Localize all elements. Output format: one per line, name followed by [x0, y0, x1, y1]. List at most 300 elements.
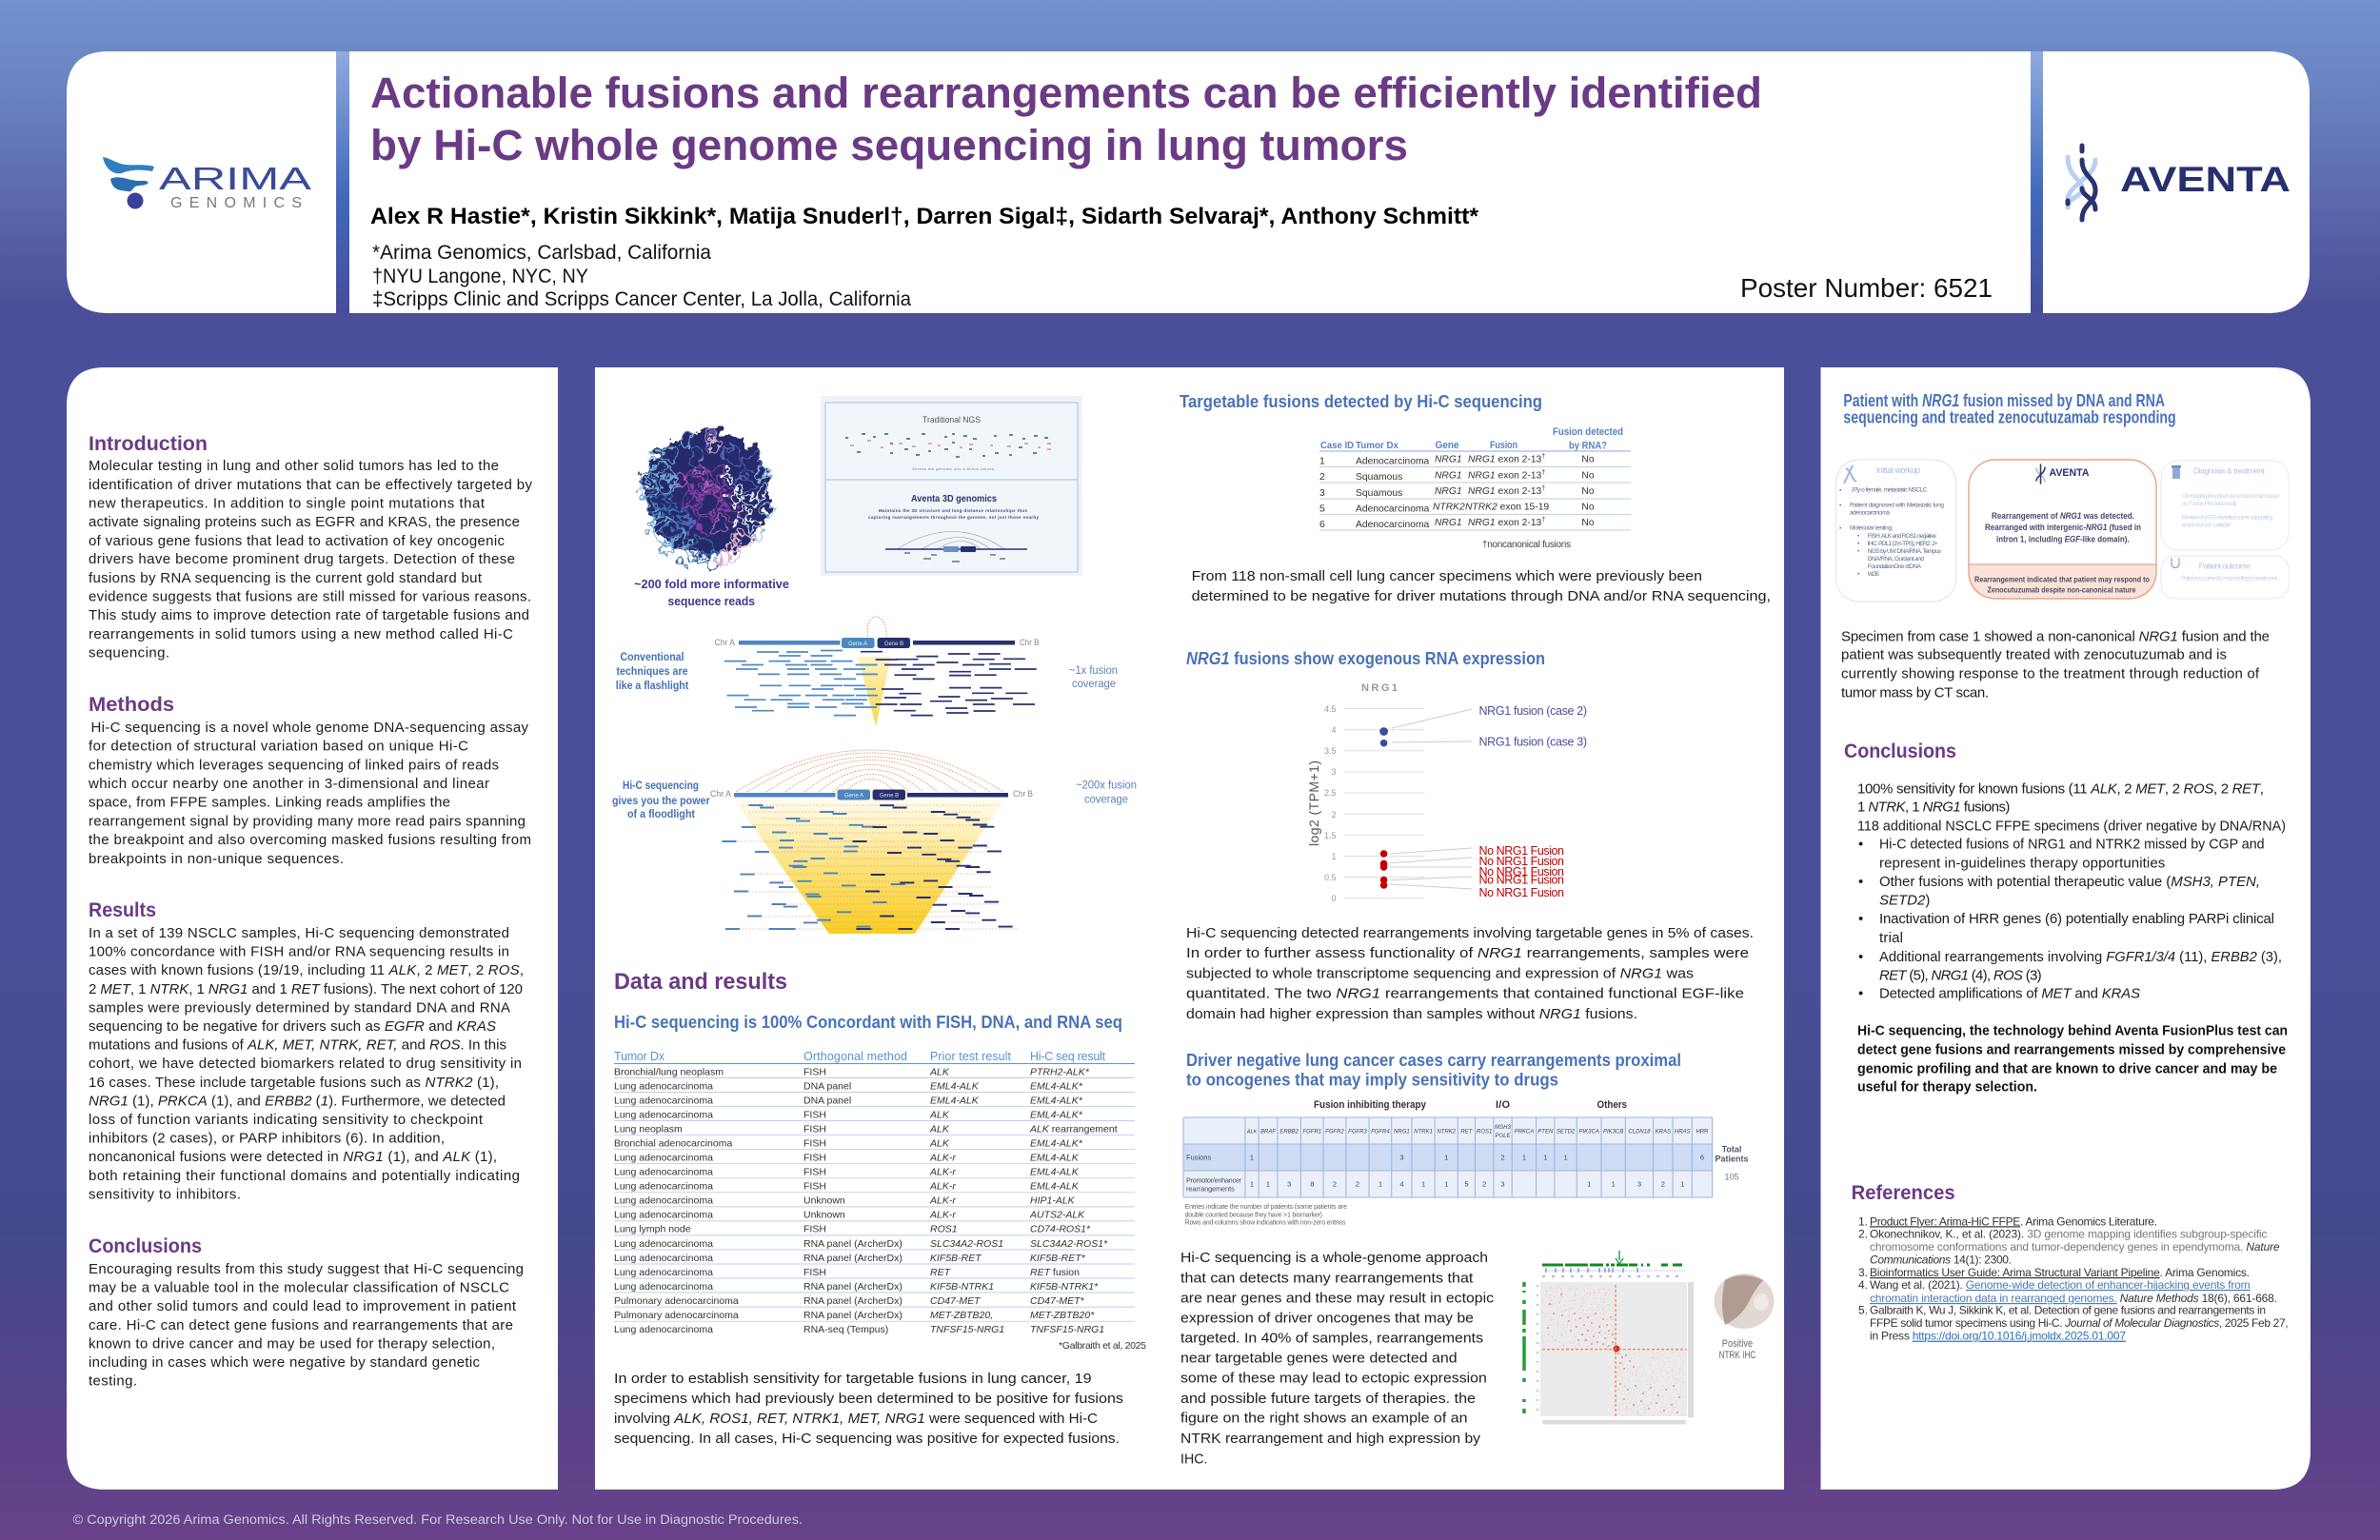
table: concordance results: Lung adenocarcinoma — [614, 1152, 713, 1163]
row: promotor/enhancer: 1 — [1378, 1180, 1382, 1189]
text: results body: both retaining their functional domains and potentially indicating — [89, 1168, 520, 1184]
chart: short reads — [845, 434, 1051, 457]
card list: • — [1857, 571, 1860, 578]
text: conclusions summary: Detected amplifications of MET and KRAS — [1879, 986, 2140, 1002]
table: concordance results: Lung adenocarcinoma — [614, 1210, 713, 1221]
group labels: Others — [1597, 1099, 1627, 1111]
panel: Traditional NGS vs Aventa 3D — [821, 396, 1082, 576]
text: whole-genome paragraph: expression of driver oncogenes that may be — [1180, 1310, 1474, 1326]
text: 118 specimens paragraph — [1192, 568, 1771, 604]
text: functionality paragraph — [1186, 925, 1754, 1022]
text: conclusions summary: Other fusions with potential therapeutic value (MSH3, PTEN, — [1879, 874, 2260, 890]
text: functionality paragraph: In order to further assess functionality of NRG1 rearrangements, samples were — [1186, 945, 1749, 961]
table: concordance results: Lung adenocarcinoma — [614, 1095, 713, 1106]
table: concordance results: SLC34A2-ROS1* — [1030, 1238, 1108, 1250]
column headers: PTEN — [1537, 1130, 1554, 1135]
box: Gene A — [842, 638, 874, 648]
diagram: conventional flashlight — [616, 617, 1118, 726]
footer: copyright: © Copyright 2026 Arima Genomics. All Rights Reserved. For Research Use Only. Not for Use in Diagnostic Procedures. — [72, 1512, 803, 1527]
table: concordance results: Lung neoplasm — [614, 1123, 683, 1135]
table: concordance results: FISH — [803, 1066, 826, 1077]
y axis labels: 1.5 — [1324, 831, 1337, 840]
title: by Hi-C whole genome sequencing in lung tumors — [370, 121, 1408, 169]
footnote: noncanonical: †noncanonical fusions — [1482, 540, 1571, 550]
card list: • — [1839, 487, 1842, 494]
card list: IHC: PDL1 (1% TPS), HER2: 2+ — [1868, 541, 1938, 547]
table: concordance results: RNA panel (ArcherDx) — [803, 1238, 902, 1250]
group labels: I/O — [1496, 1099, 1510, 1111]
column headers: ALK — [1246, 1130, 1258, 1135]
table: concordance results: Pulmonary adenocarcinoma — [614, 1310, 739, 1321]
text: conclusions summary: SETD2) — [1879, 893, 1930, 909]
figure: Hi-C contact map — [1524, 1251, 1694, 1424]
y axis labels: 1 — [1331, 852, 1337, 861]
total patients: Patients — [1715, 1155, 1749, 1164]
table: concordance results: EML4-ALK — [1030, 1152, 1080, 1163]
column headers: PRKCA — [1515, 1130, 1534, 1135]
card list: • — [1839, 503, 1842, 509]
table: biomarker matrix: Promotor/enhancer — [1186, 1176, 1242, 1185]
table: concordance results: EML4-ALK — [930, 1080, 980, 1092]
heading: References: References — [1852, 1182, 1955, 1204]
column headers: FGFR4 — [1371, 1130, 1390, 1135]
icon: DNA — [1844, 465, 1856, 484]
table: concordance results: FISH — [803, 1167, 826, 1178]
text: whole-genome paragraph: are near genes and these may result in ectopic — [1180, 1291, 1495, 1307]
text: results body — [89, 925, 524, 1202]
text: results body: loss of function variants indicating sensitivity to checkpoint — [89, 1112, 484, 1128]
table: concordance results: SLC34A2-ROS1 — [930, 1238, 1003, 1250]
text: 118 specimens paragraph: determined to be negative for driver mutations through DNA and/or RNA sequencing, — [1192, 588, 1771, 604]
card list: 37y-o female, metastatic NSCLC — [1852, 487, 1928, 494]
table: targetable fusions: NRG1 — [1435, 455, 1462, 465]
table: concordance results: ALK — [929, 1109, 950, 1120]
row: promotor/enhancer: 1 — [1421, 1180, 1425, 1189]
card list: • — [1857, 541, 1860, 547]
text: references list: Bioinformatics User Guide: Arima Structural Variant Pipeline. Arima Genomics. — [1870, 1266, 2250, 1279]
label: flashlight description: Conventional — [621, 652, 684, 663]
table: concordance results: PTRH2-ALK* — [1030, 1066, 1090, 1077]
label: floodlight description: Hi-C sequencing — [623, 780, 699, 792]
row: promotor/enhancer: 2 — [1333, 1180, 1337, 1189]
column headers: CLDN18 — [1628, 1130, 1651, 1135]
table: concordance results: TNFSF15-NRG1 — [1030, 1324, 1104, 1335]
column headers: RET — [1460, 1130, 1474, 1135]
text: methods body — [88, 720, 531, 867]
y axis labels: 0.5 — [1324, 873, 1337, 882]
labels: no fusion: No NRG1 Fusion — [1479, 886, 1564, 899]
table: concordance results: TNFSF15-NRG1 — [930, 1324, 1004, 1335]
text: results body: samples were previously determined by standard DNA and RNA — [89, 999, 510, 1016]
text: methods body: Hi-C sequencing is a novel whole genome DNA-sequencing assay — [91, 720, 529, 736]
row: promotor/enhancer: 2 — [1661, 1180, 1665, 1189]
chart: NRG1 expression dot plot — [1306, 682, 1587, 903]
card list: NGS by UW DNA/RNA, Tempus — [1868, 548, 1942, 555]
affiliations: ‡Scripps Clinic and Scripps Cancer Center, La Jolla, California — [372, 288, 911, 310]
text: conclusions body: and other solid tumors and could lead to improvement in patient — [89, 1298, 517, 1314]
table: biomarker matrix: rearrangements — [1186, 1184, 1235, 1193]
icon: Aventa mark — [2068, 146, 2095, 220]
text: conclusions body: may be a valuable tool in the molecular classification of NSCLC — [89, 1280, 509, 1296]
table: concordance results: ALK-r — [929, 1210, 956, 1221]
text: case paragraph — [1841, 628, 2270, 701]
table: concordance results: FISH — [803, 1123, 826, 1135]
table: concordance results: EML4-ALK* — [1030, 1080, 1083, 1092]
text: take-home message: Hi-C sequencing, the technology behind Aventa FusionPlus test can — [1857, 1023, 2288, 1038]
text: case paragraph: Specimen from case 1 showed a non-canonical NRG1 fusion and the — [1841, 628, 2270, 644]
caption: positive NTRK IHC — [1719, 1338, 1755, 1361]
icon: Arima logo mark — [103, 157, 154, 209]
column headers: FGFR3 — [1348, 1130, 1367, 1135]
table: concordance results: Unknown — [803, 1195, 845, 1207]
card footer: Rearrangement indicated that patient may respond to — [1974, 575, 2150, 584]
card: Aventa result — [1969, 460, 2156, 599]
card title: Diagnosis & treatment — [2193, 466, 2265, 476]
text: conclusions body: testing. — [89, 1373, 137, 1390]
column headers: NRG1 — [1394, 1130, 1410, 1135]
table: biomarker matrix — [1183, 1099, 1749, 1227]
table: concordance results: Bronchial/lung neoplasm — [614, 1066, 724, 1077]
group labels: Fusion inhibiting therapy — [1314, 1099, 1427, 1111]
table: targetable fusions: NRG1 exon 2-13 — [1468, 455, 1541, 465]
table: concordance results: EML4-ALK — [930, 1095, 980, 1106]
text: methods body: for detection of structural variation based on unique Hi-C — [89, 739, 468, 755]
text: references list: chromatin interaction data in rearranged genomes. Nature Methods 18(6), 661-668. — [1870, 1292, 2277, 1305]
y axis labels: 3 — [1331, 767, 1337, 777]
text: introduction body: rearrangements in solid tumors using a new method called Hi-C — [89, 626, 513, 642]
y axis labels — [1324, 704, 1337, 903]
heading: Results: Results — [89, 899, 156, 921]
label: floodlight description — [612, 780, 710, 820]
diagram: linked reads — [885, 531, 1027, 562]
text: introduction body — [89, 458, 533, 661]
row: promotor/enhancer: 1 — [1587, 1180, 1591, 1189]
text: conclusions summary: 1 NTRK, 1 NRG1 fusions) — [1857, 800, 2010, 816]
text: sensitivity paragraph: sequencing. In all cases, Hi-C sequencing was positive for expected fusions. — [614, 1431, 1120, 1447]
heading: driver negative: to oncogenes that may imply sensitivity to drugs — [1186, 1071, 1558, 1090]
table: concordance results: Bronchial adenocarcinoma — [614, 1138, 732, 1150]
row: promotor/enhancer: 8 — [1310, 1180, 1314, 1189]
illustration: chromatin sphere — [640, 430, 772, 567]
column headers: FGFR1 — [1302, 1130, 1321, 1135]
label: flashlight description: like a flashlight — [616, 681, 688, 692]
table: targetable fusions: Fusion — [1490, 440, 1517, 451]
card text: Review of WGS revealed some supporting — [2182, 515, 2273, 522]
text: methods body: space, from FFPE samples. Linking reads amplifies the — [89, 795, 450, 811]
heading: driver negative — [1186, 1051, 1681, 1090]
text: introduction body: of various gene fusions that lead to activation of key oncogenic — [89, 533, 505, 549]
card list: FoundationOne ctDNA — [1868, 563, 1922, 570]
column headers: HRR — [1696, 1130, 1709, 1135]
label: 1x coverage — [1069, 665, 1118, 690]
labels: no fusion — [1479, 844, 1564, 899]
table: concordance results: Lung adenocarcinoma — [614, 1253, 713, 1264]
text: whole-genome paragraph: near targetable genes were detected and — [1180, 1350, 1458, 1366]
table: targetable fusions: NRG1 exon 2-13 — [1468, 486, 1541, 497]
text: conclusions summary: • — [1858, 837, 1863, 853]
table: targetable fusions: 2 — [1319, 472, 1325, 483]
text: introduction body: new therapeutics. In addition to single point mutations that — [89, 495, 486, 512]
table: concordance results: ALK-r — [929, 1195, 956, 1207]
text: conclusions summary: 100% sensitivity for known fusions (11 ALK, 2 MET, 2 ROS, 2 RET, — [1857, 780, 2264, 797]
text: references list — [1858, 1214, 2289, 1343]
table: concordance results: Lung adenocarcinoma — [614, 1267, 713, 1278]
text: references list: 1. — [1858, 1214, 1868, 1228]
card list — [1839, 487, 1944, 578]
table: concordance results: KIF5B-NTRK1* — [1030, 1281, 1099, 1293]
table: concordance results: EML4-ALK — [1030, 1167, 1080, 1178]
table: targetable fusions: NRG1 — [1435, 518, 1462, 528]
table: targetable fusions: NRG1 — [1435, 470, 1462, 481]
column headers: NTRK1 — [1414, 1130, 1433, 1135]
table: targetable fusions: Adenocarcinoma — [1356, 457, 1430, 467]
text: case paragraph: patient was subsequently treated with zenocutuzumab and is — [1841, 647, 2227, 663]
table: concordance results: Lung lymph node — [614, 1224, 691, 1235]
text: conclusions summary: trial — [1879, 930, 1903, 946]
table: concordance results: MET-ZBTB20* — [1030, 1310, 1095, 1321]
affiliations: *Arima Genomics, Carlsbad, California — [372, 242, 711, 264]
text: references list: 3. — [1858, 1266, 1868, 1279]
table: concordance results: Lung adenocarcinoma — [614, 1167, 713, 1178]
table: targetable fusions: 1 — [1319, 457, 1325, 467]
text: whole-genome paragraph: IHC. — [1180, 1451, 1207, 1467]
text: references list: Galbraith K, Wu J, Sikkink K, et al. Detection of gene fusions and rearrangements in — [1870, 1304, 2266, 1317]
card footer: Zenocutuzumab despite non-canonical nature — [1988, 584, 2136, 594]
label: 200x coverage: ~200x fusion — [1076, 780, 1137, 792]
text: references list: 5. — [1858, 1304, 1868, 1317]
y axis labels: 2.5 — [1324, 788, 1337, 798]
caption: aventa description: capturing rearrangements throughout the genome, not just those nearby — [868, 515, 1039, 520]
text: introduction body: identification of driver mutations that can be effectively targeted by — [89, 477, 533, 493]
affiliations: †NYU Langone, NYC, NY — [372, 266, 588, 287]
row: promotor/enhancer: 1 — [1612, 1180, 1616, 1189]
panel: left column — [67, 367, 558, 1490]
text: take-home message: useful for therapy selection. — [1857, 1080, 2037, 1096]
text: introduction body: drivers have become prominent drug targets. Detection of these — [89, 551, 515, 567]
column headers: PIK3CB — [1603, 1130, 1623, 1135]
row: fusions: 3 — [1399, 1154, 1403, 1162]
text: introduction body: sequencing. — [89, 645, 169, 661]
table: targetable fusions: Tumor Dx — [1356, 440, 1398, 451]
table: targetable fusions: † — [1541, 454, 1545, 461]
panel: middle column — [595, 367, 1784, 1490]
text: functionality paragraph: subjected to whole transcriptome sequencing and expression of NRG1 was — [1186, 965, 1694, 982]
table: concordance results: CD47-MET — [930, 1295, 982, 1307]
table: biomarker matrix: MSH3 — [1495, 1125, 1511, 1131]
table: targetable fusions: No — [1581, 470, 1595, 481]
label: flashlight description: techniques are — [617, 666, 687, 678]
text: take-home message: genomic profiling and that are known to drive cancer and may be — [1857, 1061, 2277, 1076]
table: concordance results: FISH — [803, 1109, 826, 1120]
text: introduction body: This study aims to improve detection rate of targetable fusions and — [89, 607, 529, 623]
diagram: Hi-C floodlight — [612, 750, 1137, 934]
table: concordance results: EML4-ALK* — [1030, 1095, 1083, 1106]
card footer — [1974, 575, 2150, 594]
caption: aventa description: Maintains the 3D structure and long-distance relationships thus — [879, 508, 1027, 513]
table: concordance results: EML4-ALK — [1030, 1181, 1080, 1193]
card list: • — [1839, 525, 1842, 532]
text: whole-genome paragraph — [1180, 1250, 1495, 1467]
table: concordance results: FISH — [803, 1181, 826, 1193]
column headers: KRAS — [1656, 1130, 1671, 1135]
box: Gene B — [873, 790, 905, 800]
table: concordance results: Lung adenocarcinoma — [614, 1109, 713, 1120]
row: promotor/enhancer: 4 — [1399, 1180, 1403, 1189]
footnote: Galbraith: *Galbraith et al, 2025 — [1059, 1340, 1146, 1352]
heading: patient case — [1843, 391, 2176, 426]
text: results body: mutations and fusions of ALK, MET, NTRK, RET, and ROS. In this — [89, 1037, 506, 1054]
table: biomarker matrix: Fusions — [1186, 1154, 1212, 1162]
text: 118 specimens paragraph: From 118 non-small cell lung cancer specimens which were previously been — [1192, 568, 1702, 584]
caption: positive NTRK IHC: Positive — [1722, 1338, 1753, 1350]
card text: on Fusion Plus test result. — [2182, 501, 2237, 507]
text: introduction body: fusions by RNA sequencing is the current gold standard but — [89, 570, 483, 586]
text: references list: Wang et al. (2021). Genome-wide detection of enhancer-hijacking events from — [1870, 1278, 2251, 1292]
text: functionality paragraph: domain had higher expression than samples without NRG1 fusions. — [1186, 1006, 1637, 1022]
label: Chr B: Chr B — [1013, 789, 1033, 800]
table: concordance results: Lung adenocarcinoma — [614, 1181, 713, 1193]
card message: Rearrangement of NRG1 was detected. — [1992, 511, 2134, 522]
box: Gene B: Gene B — [884, 642, 903, 647]
row: fusions: 6 — [1700, 1154, 1704, 1162]
column headers: BRAF — [1260, 1130, 1276, 1135]
table: targetable fusions: Squamous — [1356, 472, 1402, 483]
text: results body: NRG1 (1), PRKCA (1), and ERBB2 (1). Furthermore, we detected — [89, 1093, 506, 1109]
text: methods body: which occur nearby one another in 3-dimensional and linear — [88, 776, 489, 792]
table: concordance results: KIF5B-RET* — [1030, 1253, 1086, 1264]
header: Arima logo panel — [67, 51, 336, 313]
column headers: NTRK2 — [1437, 1130, 1457, 1135]
labels: fusion cases: NRG1 fusion (case 2) — [1479, 704, 1587, 718]
heading: Introduction: Introduction — [89, 433, 208, 455]
text: references list: chromosome conformations and tumor-dependency genes in ependymoma. Nature — [1870, 1240, 2280, 1254]
text: results body: In a set of 139 NSCLC samples, Hi-C sequencing demonstrated — [89, 925, 509, 941]
text: results body: 16 cases. These include targetable fusions such as NTRK2 (1), — [89, 1075, 499, 1091]
labels: fusion cases — [1479, 704, 1587, 748]
y axis labels: 4 — [1331, 725, 1337, 735]
text: take-home message: detect gene fusions and rearrangements missed by comprehensive — [1857, 1042, 2286, 1057]
card list: • — [1857, 548, 1860, 555]
table: concordance results: CD74-ROS1* — [1030, 1224, 1091, 1235]
label: 200x coverage: coverage — [1084, 794, 1128, 805]
text: conclusions body: Encouraging results from this study suggest that Hi-C sequencing — [89, 1261, 524, 1277]
label: Traditional NGS: Traditional NGS — [922, 415, 981, 424]
text: case paragraph: tumor mass by CT scan. — [1841, 685, 1989, 701]
text: references list: Product Flyer: Arima-HiC FFPE. Arima Genomics Literature. — [1870, 1214, 2157, 1228]
table: concordance results: FISH — [803, 1138, 826, 1150]
table: concordance results: KIF5B-RET — [930, 1253, 982, 1264]
table: concordance results: ALK-r — [929, 1181, 956, 1193]
heading: Conclusions: Conclusions — [1844, 740, 1956, 762]
table: concordance results: Pulmonary adenocarcinoma — [614, 1295, 739, 1307]
row: fusions: 1 — [1522, 1154, 1526, 1162]
table: concordance results: ALK-r — [929, 1152, 956, 1163]
header: Aventa logo panel — [2043, 51, 2310, 313]
text: sensitivity paragraph — [614, 1371, 1123, 1447]
text: methods body: breakpoints in non-unique sequences. — [89, 851, 344, 867]
labels: fusion cases: NRG1 fusion (case 3) — [1479, 735, 1587, 748]
row: promotor/enhancer: 2 — [1356, 1180, 1359, 1189]
table: concordance results: RNA panel (ArcherDx) — [803, 1281, 902, 1293]
logo text: GENOMICS: GENOMICS — [170, 195, 302, 211]
text: whole-genome paragraph: targeted. In 40% of samples, rearrangements — [1180, 1331, 1483, 1347]
group labels — [1314, 1099, 1627, 1111]
column headers: SETD2 — [1557, 1130, 1576, 1135]
table: concordance results: FISH — [803, 1152, 826, 1163]
card message — [1985, 511, 2141, 544]
text: whole-genome paragraph: and possible future targets of therapies. the — [1180, 1391, 1476, 1407]
row: promotor/enhancer: 1 — [1250, 1180, 1254, 1189]
table: targetable fusions: † — [1541, 517, 1545, 523]
table: concordance results: KIF5B-NTRK1 — [930, 1281, 994, 1293]
text: conclusions summary: represent in-guidelines therapy opportunities — [1879, 855, 2165, 871]
text: references list: Communications 14(1): 2300. — [1870, 1254, 2012, 1267]
text: results body: cohort, we have detected biomarkers related to drug sensitivity in — [89, 1056, 522, 1072]
table: concordance results: Tumor Dx — [614, 1050, 665, 1063]
data points: fusion cases — [1379, 727, 1388, 746]
text: sensitivity paragraph: In order to establish sensitivity for targetable fusions in lung cancer, 19 — [614, 1371, 1092, 1387]
text: sensitivity paragraph: involving ALK, ROS1, RET, NTRK1, MET, NRG1 were sequenced with Hi-C — [614, 1411, 1098, 1427]
authors: Alex R Hastie*, Kristin Sikkink*, Matija Snuderl†, Darren Sigal‡, Sidarth Selvaraj*, Anthony Schmitt* — [370, 204, 1479, 229]
heading: targetable fusions: Targetable fusions detected by Hi-C sequencing — [1180, 392, 1542, 411]
heading: driver negative: Driver negative lung cancer cases carry rearrangements proximal — [1186, 1051, 1681, 1070]
text: conclusions summary: RET (5), NRG1 (4), ROS (3) — [1879, 967, 2042, 983]
text: conclusions summary: • — [1858, 986, 1863, 1002]
column headers: HRAS — [1675, 1130, 1691, 1135]
text: whole-genome paragraph: figure on the right shows an example of an — [1180, 1411, 1468, 1427]
table: concordance results: FISH — [803, 1224, 826, 1235]
card list: FISH: ALK and ROS1 negative — [1868, 533, 1936, 540]
text: sensitivity paragraph: specimens which had previously been determined to be positive for fusions — [614, 1391, 1123, 1407]
card: patient outcome — [2161, 556, 2289, 599]
text: case paragraph: currently showing response to the treatment through reduction of — [1841, 666, 2260, 682]
figure: NTRK IHC stain — [1714, 1273, 1775, 1361]
text: conclusions summary: • — [1858, 911, 1863, 927]
data points: no fusion — [1380, 850, 1387, 889]
column headers: FGFR2 — [1325, 1130, 1344, 1135]
text: whole-genome paragraph: some of these may lead to ectopic expression — [1180, 1371, 1487, 1387]
table: concordance results: ALK — [929, 1138, 950, 1150]
text: results body: noncanonical fusions were detected in NRG1 (1), and ALK (1), — [89, 1149, 497, 1165]
table: concordance results: DNA panel — [803, 1080, 851, 1092]
text: introduction body: Molecular testing in lung and other solid tumors has led to the — [89, 458, 499, 474]
table: targetable fusions: † — [1541, 469, 1545, 476]
header accent bar left — [336, 51, 349, 313]
column headers: PIK3CA — [1579, 1130, 1599, 1135]
text: take-home message — [1857, 1023, 2288, 1096]
card text: Patient is currently responding to treatment — [2181, 575, 2277, 582]
title: Actionable fusions and rearrangements can be efficiently identified — [370, 69, 1762, 117]
row: fusions: 1 — [1444, 1154, 1448, 1162]
caption: 200 fold: sequence reads — [668, 594, 755, 608]
labels: no fusion: No NRG1 Fusion — [1479, 874, 1564, 887]
text: whole-genome paragraph: Hi-C sequencing is a whole-genome approach — [1180, 1250, 1488, 1266]
table: targetable fusions: Case ID — [1320, 440, 1354, 451]
table: concordance results: CD47-MET* — [1030, 1295, 1085, 1307]
card list: Molecular testing: — [1850, 525, 1894, 532]
text: results body: sequencing to be negative for drivers such as EGFR and KRAS — [89, 1018, 496, 1035]
text: results body: inhibitors (2 cases), or PARP inhibitors (6). In addition, — [89, 1131, 445, 1147]
table: targetable fusions: No — [1581, 518, 1595, 528]
text: conclusions summary: 118 additional NSCLC FFPE specimens (driver negative by DNA/RNA) — [1857, 818, 2286, 834]
card list: DNA/RNA, Gurdant and — [1868, 556, 1924, 563]
card title: Initial workup — [1876, 465, 1920, 475]
text: functionality paragraph: quantitated. The two NRG1 rearrangements that contained functional EGF-like — [1186, 986, 1744, 1002]
text: methods body: chemistry which leverages sequencing of linked pairs of reads — [89, 757, 499, 773]
caption: aventa description — [868, 508, 1039, 520]
y axis labels: 2 — [1331, 810, 1337, 819]
row: promotor/enhancer: 2 — [1482, 1180, 1486, 1189]
